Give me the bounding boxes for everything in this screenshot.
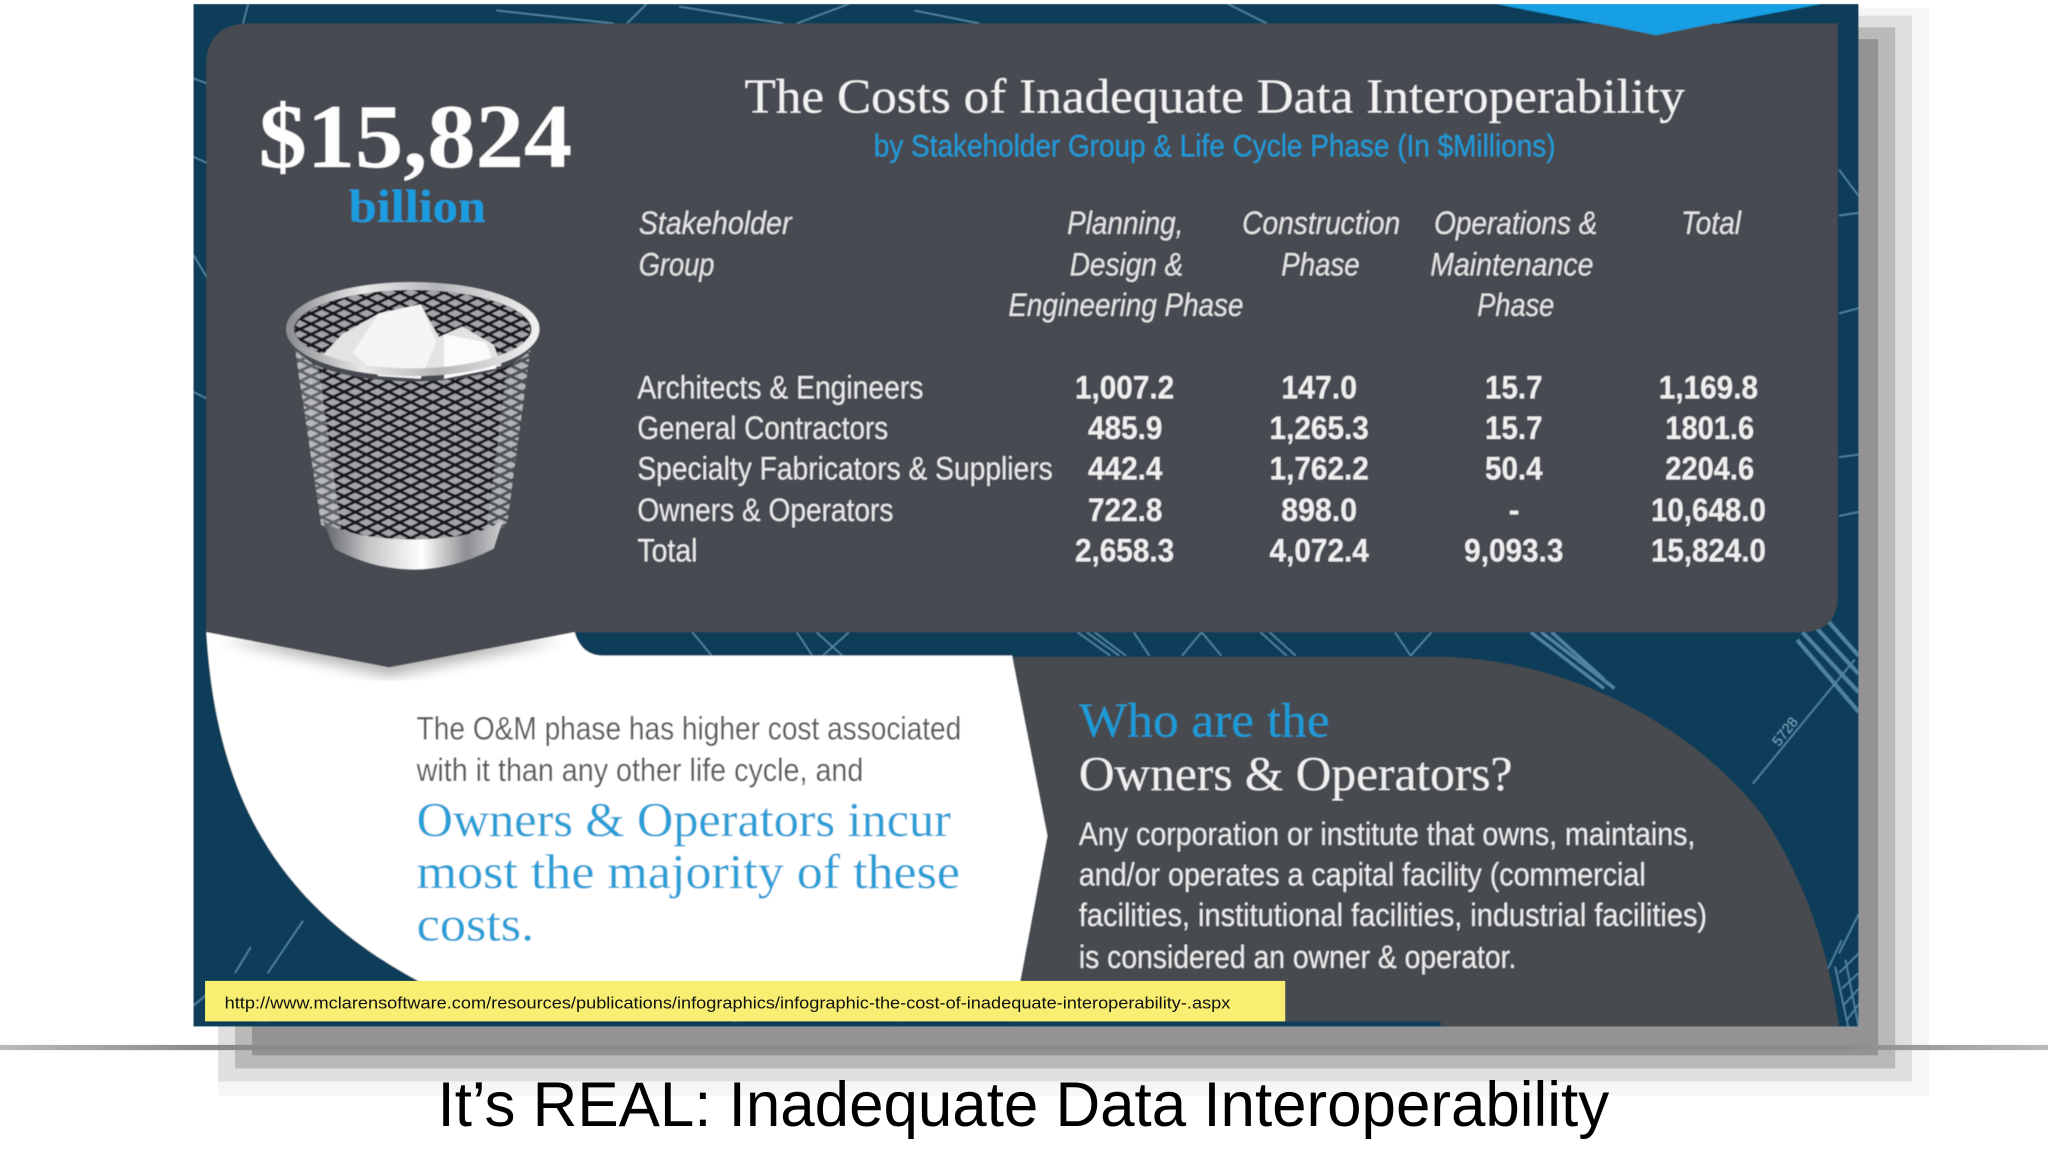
crumpled paper bbox=[317, 304, 502, 375]
lower right panel bbox=[1012, 657, 1839, 1027]
values: 1801.6 bbox=[1665, 409, 1754, 446]
values: 1,169.8 bbox=[1659, 368, 1758, 405]
big number: $15,824 bbox=[259, 86, 572, 187]
values: 9,093.3 bbox=[1464, 532, 1563, 569]
column headers: Group bbox=[639, 246, 714, 283]
owners body text: facilities, institutional facilities, industrial facilities) bbox=[1079, 896, 1707, 933]
bottom navy strip bbox=[193, 1021, 1441, 1027]
column headers: Engineering Phase bbox=[1008, 286, 1243, 323]
owners heading: Who are the bbox=[1079, 695, 1330, 748]
billion label: billion bbox=[349, 181, 486, 233]
owners body text: Any corporation or institute that owns, maintains, bbox=[1079, 815, 1695, 852]
divider rule bbox=[0, 1045, 2048, 1050]
callout highlight text: costs. bbox=[417, 898, 534, 951]
owners heading: Owners & Operators? bbox=[1079, 748, 1512, 801]
blue ribbon tip bbox=[1496, 4, 1822, 24]
values: 15,824.0 bbox=[1651, 532, 1766, 569]
row labels: General Contractors bbox=[637, 409, 888, 446]
owners body text bbox=[1079, 815, 1707, 975]
navy blueprint background bbox=[193, 4, 1859, 1027]
values: 50.4 bbox=[1485, 449, 1543, 486]
owners body text: and/or operates a capital facility (commercial bbox=[1079, 856, 1646, 893]
callout highlight text: Owners & Operators incur bbox=[417, 794, 951, 847]
values: 1,007.2 bbox=[1075, 368, 1174, 405]
table subtitle: by Stakeholder Group & Life Cycle Phase (In $Millions) bbox=[874, 129, 1556, 164]
source url bar bbox=[205, 981, 1285, 1021]
row labels: Total bbox=[637, 532, 697, 569]
row labels: Specialty Fabricators & Suppliers bbox=[637, 449, 1053, 486]
values: - bbox=[1509, 491, 1519, 528]
values: 1,265.3 bbox=[1270, 409, 1369, 446]
column headers: Total bbox=[1681, 204, 1742, 241]
drop shadow bbox=[218, 8, 1929, 1096]
values: 147.0 bbox=[1281, 368, 1357, 405]
body shading bbox=[295, 350, 342, 536]
basket inner bbox=[294, 310, 531, 334]
column headers: Phase bbox=[1477, 286, 1554, 323]
top rim bbox=[290, 286, 536, 372]
chevron shadow bbox=[222, 640, 562, 677]
column headers bbox=[639, 204, 1742, 323]
callout highlight text bbox=[417, 794, 960, 951]
row labels bbox=[637, 368, 1053, 569]
values: 898.0 bbox=[1281, 491, 1357, 528]
column headers: Stakeholder bbox=[639, 204, 792, 241]
owners body text: is considered an owner & operator. bbox=[1079, 938, 1516, 975]
values: 15.7 bbox=[1485, 409, 1543, 446]
column headers: Phase bbox=[1281, 246, 1360, 283]
blueprint lines bbox=[193, 4, 1859, 1027]
icon: wastebasket bbox=[290, 286, 536, 569]
owners heading bbox=[1079, 695, 1512, 801]
values bbox=[1075, 368, 1766, 569]
column headers: Construction bbox=[1242, 204, 1400, 241]
column headers: Planning, bbox=[1067, 204, 1183, 241]
mesh body bbox=[295, 350, 530, 542]
values: 1,762.2 bbox=[1270, 449, 1369, 486]
table bbox=[637, 204, 1766, 569]
values: 722.8 bbox=[1088, 491, 1162, 528]
column headers: Maintenance bbox=[1430, 246, 1593, 283]
row labels: Architects & Engineers bbox=[637, 368, 923, 405]
values: 10,648.0 bbox=[1651, 491, 1766, 528]
main dark panel bbox=[206, 24, 1838, 667]
values: 2,658.3 bbox=[1075, 532, 1174, 569]
values: 2204.6 bbox=[1665, 449, 1754, 486]
table title: The Costs of Inadequate Data Interoperability bbox=[744, 70, 1685, 123]
row labels: Owners & Operators bbox=[637, 491, 893, 528]
values: 15.7 bbox=[1485, 368, 1543, 405]
callout intro text bbox=[416, 709, 961, 788]
callout intro text: with it than any other life cycle, and bbox=[416, 751, 863, 788]
values: 4,072.4 bbox=[1270, 532, 1369, 569]
column headers: Operations & bbox=[1434, 204, 1597, 241]
values: 442.4 bbox=[1088, 449, 1162, 486]
column headers: Design & bbox=[1070, 246, 1183, 283]
white callout shape bbox=[206, 632, 1048, 982]
source url bar: http://www.mclarensoftware.com/resources/publications/infographics/infographic-the-cost-of-inadequate-interoperability-.aspx bbox=[225, 993, 1231, 1012]
base ring bbox=[323, 520, 503, 569]
blue ribbon tip over panel bbox=[1599, 23, 1714, 36]
callout highlight text: most the majority of these bbox=[417, 846, 960, 899]
callout intro text: The O&M phase has higher cost associated bbox=[417, 709, 961, 746]
values: 485.9 bbox=[1088, 409, 1162, 446]
slide caption: It’s REAL: Inadequate Data Interoperability bbox=[438, 1070, 1610, 1140]
label: dimension number: 5728 bbox=[1769, 715, 1802, 750]
infographic image bbox=[193, 4, 1859, 1027]
